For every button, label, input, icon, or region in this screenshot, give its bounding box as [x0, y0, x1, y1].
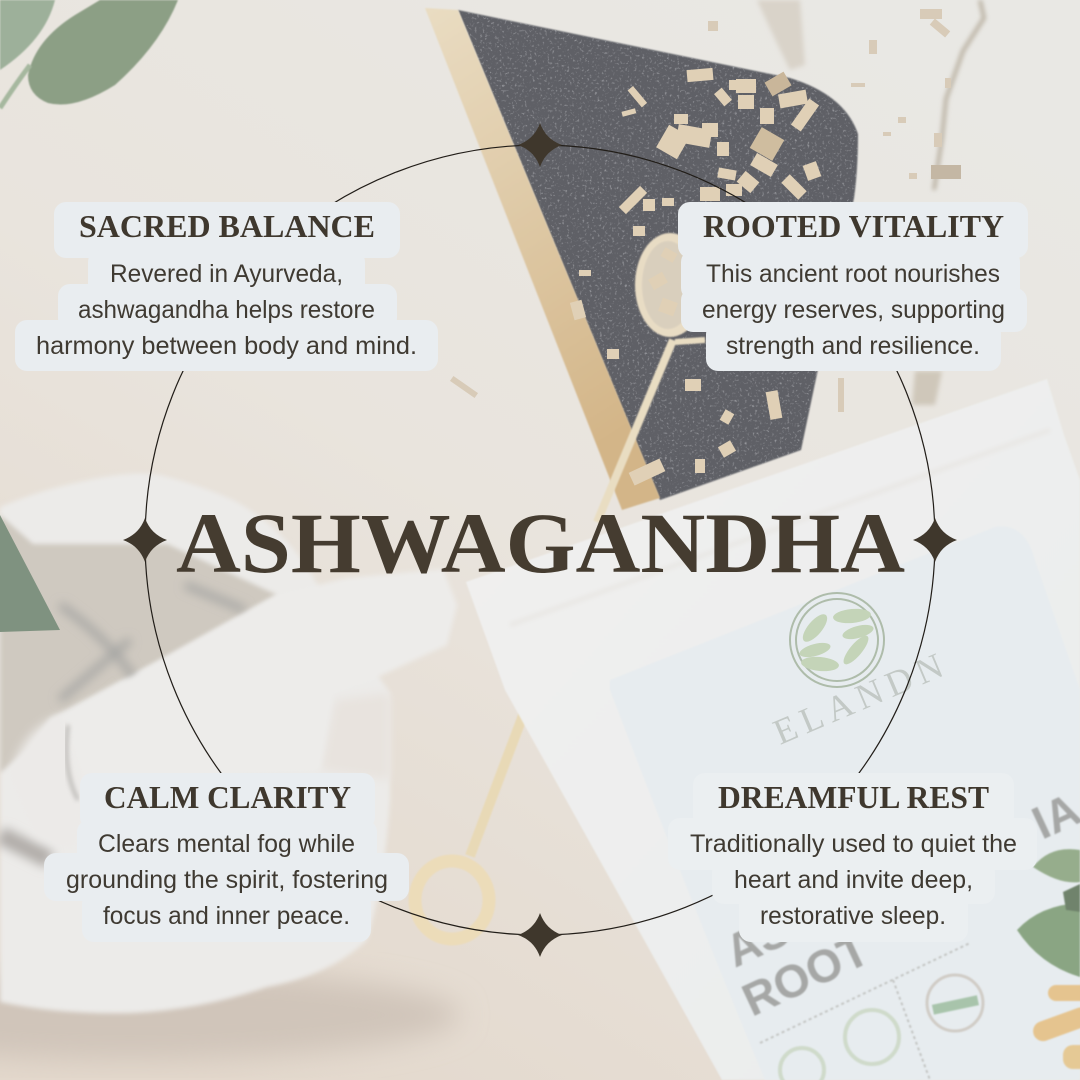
text: dreamful rest body: [690, 830, 1017, 930]
marble board with gold strip: [425, 8, 858, 510]
root chips: [450, 9, 961, 486]
text: rooted vitality body: [702, 260, 1005, 360]
wooden spoon: [415, 233, 705, 939]
panel: dreamful rest: [668, 773, 1037, 942]
pouch product text: ROOT: [734, 923, 877, 1026]
text: sacred balance body: [36, 260, 417, 360]
panel: rooted vitality: [678, 202, 1028, 371]
text: rooted vitality body: This ancient root nourishes: [706, 260, 1000, 288]
text: calm clarity body: Clears mental fog while: [98, 830, 355, 858]
text: rooted vitality body: strength and resilience.: [726, 332, 980, 360]
pouch product text: [717, 782, 1080, 1026]
title: ASHWAGANDHA: [176, 495, 905, 591]
star: right: [913, 518, 957, 562]
heading: rooted vitality: ROOTED VITALITY: [703, 208, 1004, 244]
text: rooted vitality body: energy reserves, supporting: [702, 296, 1005, 324]
panel: sacred balance: [15, 202, 438, 371]
pouch product text: AS: [717, 903, 797, 977]
text: calm clarity body: [66, 830, 388, 930]
panel: calm clarity: [44, 773, 409, 942]
pouch badges: [760, 943, 983, 1080]
green leaves top left: [0, 0, 178, 108]
green leaf beside mortar: [0, 515, 60, 632]
pouch logo: [790, 593, 884, 687]
mortar and pestle: [0, 474, 460, 1060]
star: top: [518, 123, 562, 167]
green leaves and roots on pouch: [1017, 849, 1080, 1069]
heading: calm clarity: CALM CLARITY: [104, 779, 351, 815]
product pouch: [466, 379, 1080, 1080]
pouch brand text: ELANDN: [767, 645, 949, 752]
heading: dreamful rest: DREAMFUL REST: [718, 779, 989, 815]
text: sacred balance body: Revered in Ayurveda,: [110, 260, 343, 288]
text: sacred balance body: harmony between body and mind.: [36, 332, 417, 360]
text: dreamful rest body: heart and invite deep,: [734, 866, 973, 894]
circle frame: [145, 145, 935, 935]
star: left: [123, 518, 167, 562]
star: bottom: [518, 913, 562, 957]
marble veins: [757, 0, 984, 405]
text: calm clarity body: focus and inner peace.: [103, 902, 350, 930]
text: calm clarity body: grounding the spirit, fostering: [66, 866, 388, 894]
text: sacred balance body: ashwagandha helps restore: [78, 296, 375, 324]
text: dreamful rest body: restorative sleep.: [760, 902, 946, 930]
text: dreamful rest body: Traditionally used to quiet the: [690, 830, 1017, 858]
heading: sacred balance: SACRED BALANCE: [79, 208, 375, 244]
